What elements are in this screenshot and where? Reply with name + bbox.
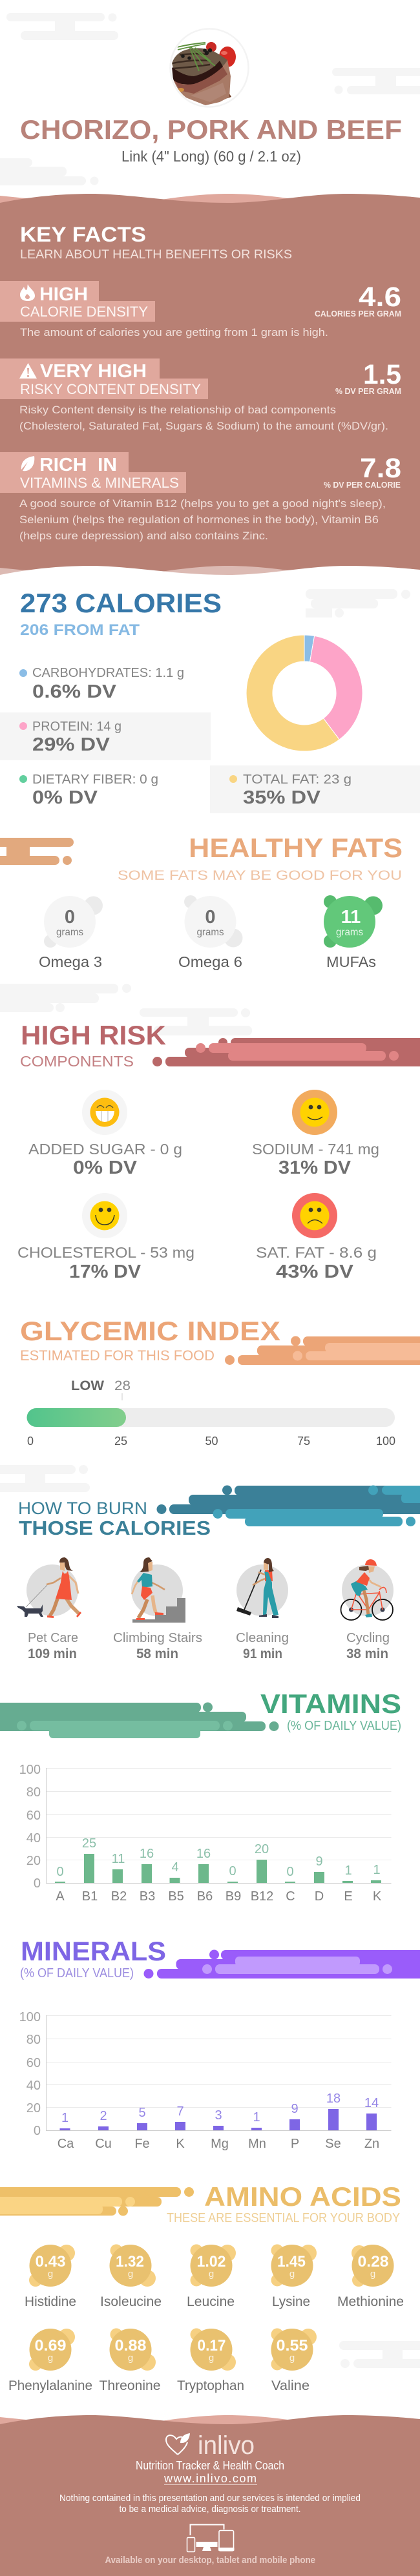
bar chart: minerals: K bbox=[176, 2137, 185, 2151]
logo: inlivo: inlivo bbox=[198, 2431, 255, 2460]
gauge: low 28: LOW bbox=[71, 1378, 104, 1393]
panel: vitamins bbox=[0, 1688, 401, 1904]
heading: vitamins: VITAMINS bbox=[260, 1688, 401, 1719]
amino: valine: g bbox=[289, 2353, 295, 2363]
bar chart: minerals: Cu bbox=[95, 2137, 112, 2151]
amino: tryptophan bbox=[177, 2328, 244, 2393]
legend: carbohydrates bbox=[19, 666, 184, 702]
subheading: (% OF DAILY VALUE) bbox=[287, 1719, 401, 1733]
panel: how to burn those calories bbox=[17, 1486, 420, 1661]
amino: leucine: 1.02 bbox=[196, 2253, 226, 2270]
amino: threonine: 0.88 bbox=[115, 2337, 146, 2354]
bar chart: vitamins: 0 bbox=[286, 1865, 294, 1879]
bar chart: minerals: Fe bbox=[134, 2137, 150, 2151]
amino: isoleucine: Isoleucine bbox=[100, 2294, 162, 2309]
bar chart: minerals: P bbox=[291, 2137, 299, 2151]
fact: rich in vitamins and minerals: (helps cure depression) and also contains Zinc. bbox=[19, 530, 268, 542]
gauge: low 28: 25 bbox=[114, 1435, 127, 1448]
bar chart: minerals: Se bbox=[325, 2137, 341, 2151]
amino: methionine: g bbox=[370, 2269, 375, 2280]
activity: pet care: Pet Care bbox=[28, 1631, 78, 1645]
amino: lysine: g bbox=[289, 2269, 295, 2280]
legend: protein: 29% DV bbox=[32, 734, 110, 755]
panel: glycemic index bbox=[20, 1316, 420, 1448]
fact: rich in vitamins and minerals bbox=[0, 452, 401, 542]
activity: cycling: Cycling bbox=[346, 1631, 390, 1645]
bar chart: minerals: 3 bbox=[215, 2108, 222, 2123]
bar chart: minerals: 0 bbox=[34, 2124, 41, 2138]
legend: dietary fiber: DIETARY FIBER: 0 g bbox=[32, 773, 158, 787]
subheading: LEARN ABOUT HEALTH BENEFITS OR RISKS bbox=[20, 248, 292, 262]
website link: www.inlivo.com bbox=[163, 2472, 257, 2485]
amino: valine: Valine bbox=[271, 2378, 310, 2393]
activity: climbing stairs: Climbing Stairs bbox=[113, 1631, 202, 1645]
fact: calorie density: The amount of calories you are getting from 1 gram is high. bbox=[20, 326, 328, 338]
item: sodium: SODIUM - 741 mg bbox=[252, 1141, 379, 1158]
title: CHORIZO, PORK AND BEEF bbox=[20, 114, 402, 145]
bar chart: vitamins: 100 bbox=[19, 1763, 41, 1777]
amino: phenylalanine bbox=[8, 2329, 92, 2393]
bar chart: minerals: Mn bbox=[248, 2137, 266, 2151]
amino: histidine: Histidine bbox=[25, 2294, 76, 2309]
legend: protein bbox=[19, 720, 121, 755]
badge: omega 6: grams bbox=[196, 927, 224, 938]
heading: high risk: HIGH RISK bbox=[21, 1020, 166, 1050]
legend: total fat: TOTAL FAT: 23 g bbox=[243, 773, 352, 787]
bar chart: vitamins: 16 bbox=[140, 1847, 154, 1861]
item: cholesterol: CHOLESTEROL - 53 mg bbox=[17, 1244, 194, 1261]
activity: cleaning bbox=[236, 1558, 289, 1661]
amino: leucine: g bbox=[209, 2269, 214, 2280]
badge: MUFAs: grams bbox=[336, 927, 363, 938]
amino: phenylalanine: Phenylalanine bbox=[8, 2378, 92, 2393]
amino: leucine: Leucine bbox=[187, 2294, 235, 2309]
item: sodium: 31% DV bbox=[278, 1158, 352, 1178]
bar chart: minerals: Zn bbox=[364, 2137, 379, 2151]
item: saturated fat: 43% DV bbox=[276, 1262, 354, 1282]
amino: isoleucine: g bbox=[128, 2269, 133, 2280]
bar chart: minerals: 20 bbox=[26, 2101, 41, 2115]
amino: threonine: Threonine bbox=[100, 2378, 160, 2393]
panel: high risk bbox=[17, 1020, 420, 1282]
fact: rich in vitamins and minerals: RICH IN bbox=[39, 455, 117, 475]
bar chart: vitamins: B3 bbox=[140, 1889, 155, 1904]
fact: risky content density bbox=[0, 358, 401, 432]
badge: omega 6: Omega 6 bbox=[178, 953, 242, 970]
badge: omega 3: grams bbox=[56, 927, 83, 938]
amino: threonine: g bbox=[128, 2353, 133, 2363]
serving size: Link (4" Long) (60 g / 2.1 oz) bbox=[121, 148, 301, 165]
fact: risky content density: (Cholesterol, Saturated Fat, Sugars & Sodium) to the amount (%DV/gr). bbox=[19, 420, 388, 432]
bar chart: minerals: 80 bbox=[26, 2033, 41, 2047]
badge: omega 6 bbox=[178, 895, 243, 970]
amino: phenylalanine: 0.69 bbox=[35, 2337, 66, 2354]
item: cholesterol bbox=[17, 1193, 194, 1282]
item: sodium bbox=[252, 1090, 379, 1178]
bar chart: minerals: 1 bbox=[253, 2110, 260, 2124]
legend: total fat bbox=[229, 773, 352, 808]
bar chart: vitamins: 0 bbox=[34, 1876, 41, 1891]
amino: valine bbox=[271, 2328, 317, 2393]
badge: omega 3 bbox=[39, 896, 103, 970]
donut chart bbox=[246, 635, 362, 751]
activity: cleaning: Cleaning bbox=[236, 1631, 289, 1645]
item: saturated fat bbox=[256, 1193, 377, 1282]
amino: lysine: Lysine bbox=[272, 2294, 310, 2309]
fact: risky content density: RISKY CONTENT DENSITY bbox=[20, 381, 201, 397]
fact: risky content density: % DV PER GRAM bbox=[335, 386, 401, 396]
bar chart: minerals: 18 bbox=[326, 2092, 341, 2106]
gauge: low 28: 0 bbox=[27, 1435, 34, 1448]
amino: leucine bbox=[187, 2244, 236, 2309]
item: added sugar bbox=[28, 1090, 182, 1178]
amino: tryptophan: 0.17 bbox=[198, 2337, 226, 2354]
subheading: from fat: 206 FROM FAT bbox=[20, 621, 140, 639]
bar chart: minerals bbox=[19, 2010, 392, 2151]
item: saturated fat: SAT. FAT - 8.6 g bbox=[256, 1244, 377, 1261]
subheading: ESTIMATED FOR THIS FOOD bbox=[20, 1347, 215, 1364]
amino: methionine: 0.28 bbox=[358, 2253, 389, 2270]
heading: amino acids: AMINO ACIDS bbox=[204, 2181, 401, 2212]
bar chart: vitamins: 60 bbox=[26, 1809, 41, 1823]
availability note: Available on your desktop, tablet and mobile phone bbox=[105, 2555, 315, 2566]
amino: isoleucine bbox=[100, 2244, 162, 2309]
bar chart: minerals: 2 bbox=[100, 2109, 107, 2123]
bar chart: vitamins: 1 bbox=[373, 1863, 381, 1877]
bar chart: vitamins: A bbox=[56, 1889, 65, 1904]
panel: healthy fats bbox=[0, 833, 403, 970]
bar chart: minerals: 100 bbox=[19, 2010, 41, 2024]
badge: MUFAs bbox=[324, 895, 383, 970]
amino: phenylalanine: g bbox=[48, 2353, 53, 2363]
amino: histidine bbox=[25, 2245, 76, 2309]
bar chart: minerals: 14 bbox=[364, 2096, 379, 2110]
gauge: low 28: 50 bbox=[205, 1435, 218, 1448]
heading: calories: 273 CALORIES bbox=[20, 588, 222, 618]
icon: devices bbox=[187, 2524, 234, 2551]
tagline: Nutrition Tracker & Health Coach bbox=[136, 2459, 284, 2472]
fact: risky content density: 1.5 bbox=[363, 359, 401, 390]
bar chart: vitamins: 20 bbox=[255, 1842, 269, 1856]
bar chart: vitamins: C bbox=[286, 1889, 295, 1904]
bar chart: minerals: 7 bbox=[176, 2104, 184, 2119]
bar chart: minerals: 60 bbox=[26, 2056, 41, 2070]
activity: cycling: 38 min bbox=[346, 1646, 388, 1661]
subheading: (% OF DAILY VALUE) bbox=[20, 1966, 134, 1980]
bar chart: minerals: Mg bbox=[211, 2137, 229, 2151]
legend: protein: PROTEIN: 14 g bbox=[32, 720, 121, 734]
subheading: components: COMPONENTS bbox=[20, 1053, 134, 1070]
bar chart: vitamins: 9 bbox=[315, 1854, 323, 1869]
gauge: low 28: 75 bbox=[297, 1435, 310, 1448]
bar chart: vitamins: 80 bbox=[26, 1785, 41, 1800]
amino: threonine bbox=[100, 2328, 160, 2393]
amino: histidine: g bbox=[48, 2269, 53, 2280]
fact: calorie density: CALORIE DENSITY bbox=[20, 304, 148, 320]
activity: climbing stairs bbox=[113, 1557, 202, 1661]
fact: rich in vitamins and minerals: Selenium (helps the regulation of hormones in the body), Vitamin B6 bbox=[19, 514, 379, 526]
activity: pet care: 109 min bbox=[28, 1646, 77, 1661]
heading: healthy fats: HEALTHY FATS bbox=[189, 833, 403, 863]
heading: minerals: MINERALS bbox=[21, 1936, 166, 1966]
heading: those calories: THOSE CALORIES bbox=[19, 1517, 211, 1539]
item: cholesterol: 17% DV bbox=[69, 1262, 142, 1282]
panel: minerals bbox=[19, 1936, 420, 2151]
gauge: low 28 bbox=[27, 1378, 395, 1448]
badge: MUFAs: 11 bbox=[341, 907, 361, 928]
bar chart: vitamins: 16 bbox=[196, 1847, 211, 1861]
subheading: THESE ARE ESSENTIAL FOR YOUR BODY bbox=[167, 2211, 400, 2225]
activity: pet care bbox=[17, 1557, 81, 1661]
bar chart: vitamins: 40 bbox=[26, 1831, 41, 1845]
fact: calorie density bbox=[0, 281, 401, 338]
amino: methionine: Methionine bbox=[337, 2294, 404, 2309]
badge: MUFAs: MUFAs bbox=[326, 953, 376, 970]
panel: calories bbox=[0, 588, 420, 813]
disclaimer: Nothing contained in this presentation and our services is intended or implied bbox=[59, 2493, 361, 2504]
bar chart: vitamins: 0 bbox=[56, 1865, 64, 1879]
legend: carbohydrates: 0.6% DV bbox=[32, 681, 117, 702]
gauge: low 28: 100 bbox=[376, 1435, 395, 1448]
bar chart: vitamins bbox=[19, 1763, 392, 1904]
item: added sugar: ADDED SUGAR - 0 g bbox=[28, 1141, 182, 1158]
badge: omega 3: 0 bbox=[65, 907, 75, 928]
icon: flame bbox=[20, 284, 35, 301]
fact: risky content density: Risky Content density is the relationship of bad components bbox=[19, 404, 336, 416]
legend: carbohydrates: CARBOHYDRATES: 1.1 g bbox=[32, 666, 184, 680]
amino: tryptophan: Tryptophan bbox=[177, 2378, 244, 2393]
bar chart: minerals: 1 bbox=[61, 2111, 68, 2125]
subheading: SOME FATS MAY BE GOOD FOR YOU bbox=[118, 868, 402, 883]
disclaimer: to be a medical advice, diagnosis or treatment. bbox=[119, 2504, 301, 2515]
panel: footer bbox=[0, 2415, 420, 2576]
bar chart: vitamins: 4 bbox=[171, 1860, 179, 1875]
gauge: low 28: 28 bbox=[114, 1378, 131, 1393]
bar chart: vitamins: 1 bbox=[344, 1864, 352, 1878]
amino: lysine: 1.45 bbox=[277, 2253, 306, 2270]
legend: total fat: 35% DV bbox=[243, 787, 321, 808]
fact: rich in vitamins and minerals: VITAMINS & MINERALS bbox=[20, 475, 179, 491]
icon: warning triangle bbox=[19, 363, 37, 379]
bar chart: vitamins: 25 bbox=[82, 1836, 96, 1851]
bar chart: minerals: Ca bbox=[58, 2137, 74, 2151]
fact: calorie density: CALORIES PER GRAM bbox=[315, 309, 401, 318]
bar chart: vitamins: 20 bbox=[26, 1854, 41, 1868]
bar chart: vitamins: B12 bbox=[251, 1889, 273, 1904]
amino: lysine bbox=[271, 2244, 317, 2309]
bar chart: vitamins: B2 bbox=[111, 1889, 127, 1904]
disclaimer bbox=[59, 2493, 361, 2515]
fact: risky content density: VERY HIGH bbox=[40, 361, 147, 382]
bar chart: minerals: 5 bbox=[138, 2106, 146, 2120]
bar chart: minerals: 40 bbox=[26, 2079, 41, 2093]
logo: inlivo bbox=[166, 2431, 255, 2460]
amino: methionine bbox=[337, 2245, 404, 2309]
bar chart: vitamins: B1 bbox=[82, 1889, 98, 1904]
badge: omega 3: Omega 3 bbox=[39, 953, 102, 970]
icon: food photo bbox=[171, 28, 248, 107]
amino: histidine: 0.43 bbox=[35, 2253, 66, 2270]
bar chart: vitamins: E bbox=[344, 1889, 353, 1904]
activity: cycling bbox=[341, 1559, 394, 1661]
panel: amino acids bbox=[0, 2181, 404, 2393]
amino: isoleucine: 1.32 bbox=[116, 2253, 144, 2270]
fact: rich in vitamins and minerals: % DV PER CALORIE bbox=[324, 480, 401, 490]
bar chart: minerals: 9 bbox=[291, 2102, 299, 2116]
bar chart: vitamins: 11 bbox=[112, 1852, 125, 1866]
bar chart: vitamins: B5 bbox=[168, 1889, 184, 1904]
bar chart: vitamins: D bbox=[315, 1889, 324, 1904]
heading: key facts: KEY FACTS bbox=[20, 223, 146, 246]
heading: glycemic index: GLYCEMIC INDEX bbox=[20, 1316, 280, 1346]
panel: key facts bbox=[0, 194, 420, 585]
activity: cleaning: 91 min bbox=[243, 1646, 282, 1661]
bar chart: vitamins: B9 bbox=[226, 1889, 241, 1904]
fact: rich in vitamins and minerals: A good source of Vitamin B12 (helps you to get a good night's sleep), bbox=[19, 497, 386, 510]
bar chart: vitamins: 0 bbox=[229, 1864, 236, 1878]
legend: dietary fiber: 0% DV bbox=[32, 787, 98, 808]
bar chart: vitamins: K bbox=[373, 1889, 382, 1904]
fact: rich in vitamins and minerals: 7.8 bbox=[360, 453, 401, 484]
heading: how to burn: HOW TO BURN bbox=[18, 1499, 147, 1518]
fact: calorie density: HIGH bbox=[39, 284, 88, 305]
legend: dietary fiber bbox=[19, 773, 158, 808]
amino: valine: 0.55 bbox=[277, 2337, 308, 2354]
badge: omega 6: 0 bbox=[205, 907, 216, 928]
amino: tryptophan: g bbox=[209, 2353, 214, 2363]
bar chart: vitamins: B6 bbox=[197, 1889, 213, 1904]
activity: climbing stairs: 58 min bbox=[136, 1646, 178, 1661]
item: added sugar: 0% DV bbox=[73, 1158, 138, 1178]
icon: leaf bbox=[21, 456, 34, 471]
fact: calorie density: 4.6 bbox=[359, 282, 401, 313]
